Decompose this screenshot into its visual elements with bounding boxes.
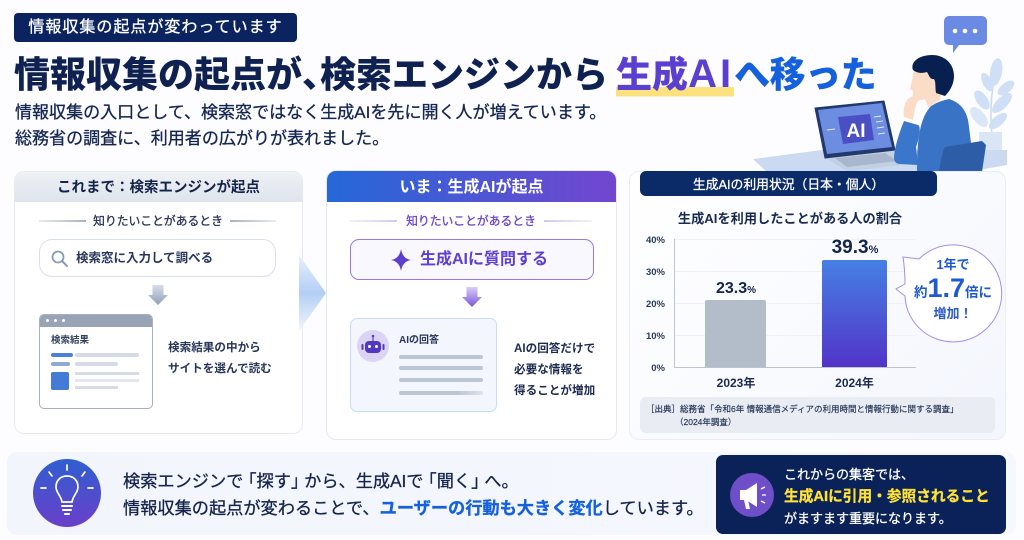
source note: ［出典］総務省「令和6年 情報通信メディアの利用時間と情報行動に関する調査」 <box>646 404 958 414</box>
panel: usage chart <box>629 171 1006 440</box>
source note <box>640 397 995 433</box>
callout: dark box <box>716 455 1006 534</box>
bar: 2024: 39.3% <box>832 237 879 258</box>
chart panel heading: 生成AIの利用状況（日本・個人） <box>693 177 884 192</box>
bar: 2024: 2024年 <box>835 375 874 390</box>
desk <box>753 150 1007 172</box>
dark box text: 生成AIに引用・参照されること <box>784 488 990 504</box>
icon: robot <box>357 330 389 362</box>
bottom message: 情報収集の起点が変わることで、ユーザーの行動も大きく変化しています。 <box>123 498 704 518</box>
icon: laptop <box>815 101 918 171</box>
bottom band <box>7 452 1016 535</box>
AI answer card <box>350 318 497 412</box>
panel heading: いま：生成AIが起点 <box>399 179 544 196</box>
ask text: 生成AIに質問する <box>420 251 548 268</box>
bar chart <box>646 235 916 390</box>
y axis labels: 10% <box>646 331 666 342</box>
subtitle: 情報収集の入口として、検索窓ではなく生成AIを先に開く人が増えています。 <box>15 103 606 122</box>
icon: light bulb <box>33 459 101 527</box>
callout: 1.7x: 1年で <box>936 257 970 272</box>
label: when wanting to know: 知りたいことがあるとき <box>93 214 223 228</box>
top tag <box>14 13 297 42</box>
icon: plant <box>967 57 1017 157</box>
panel: before <box>14 171 303 434</box>
bottom message <box>123 471 704 518</box>
bottom message: 検索エンジンで「探す」から、生成AIで「聞く」へ。 <box>123 471 519 491</box>
big arrow between panels <box>299 256 326 330</box>
window heading: 検索結果 <box>51 335 89 346</box>
results text <box>168 341 272 375</box>
chart title: 生成AIを利用したことがある人の割合 <box>678 211 902 226</box>
results text: 検索結果の中から <box>168 341 261 354</box>
answer text <box>514 342 595 397</box>
panel: now <box>326 170 617 440</box>
y axis labels: 40% <box>646 235 666 246</box>
title: 生成AI <box>616 52 734 96</box>
answer label: AIの回答 <box>399 335 439 346</box>
icon: speech bubble <box>944 16 987 53</box>
y axis labels <box>646 235 666 374</box>
callout: 1.7x: 約1.7倍に <box>914 273 992 303</box>
panel heading <box>327 171 616 202</box>
answer text: 得ることが増加 <box>514 384 595 397</box>
results text: サイトを選んで読む <box>168 362 272 375</box>
dark box text: がますます重要になります。 <box>784 511 952 526</box>
icon: laptop: AI <box>846 121 866 142</box>
panel heading <box>15 172 302 202</box>
subtitle <box>15 103 606 148</box>
window bar <box>40 315 154 327</box>
dark box text <box>784 467 990 526</box>
bar: 2023 <box>705 280 766 390</box>
bar: 2023: 23.3% <box>716 280 756 297</box>
bar: 2023: 2023年 <box>717 375 755 390</box>
answer text: 必要な情報を <box>514 363 584 376</box>
callout: 1.7x <box>895 244 1002 342</box>
source note: （2024年調査） <box>675 417 736 427</box>
chart panel heading <box>640 171 937 196</box>
icon: megaphone <box>730 473 774 517</box>
y axis labels: 0% <box>651 363 666 374</box>
answer text: AIの回答だけで <box>514 342 595 355</box>
ask AI box <box>350 239 594 280</box>
icon: sparkle <box>391 249 411 271</box>
y axis labels: 20% <box>646 299 666 310</box>
search text: 検索窓に入力して調べる <box>76 251 213 265</box>
window dots <box>46 319 49 322</box>
y axis labels: 30% <box>646 267 666 278</box>
illustration: person at laptop <box>753 16 1014 171</box>
callout: 1.7x: 増加！ <box>933 306 973 321</box>
panel heading: これまで：検索エンジンが起点 <box>57 180 260 196</box>
browser results window <box>39 314 153 409</box>
arrow down gray <box>148 285 168 305</box>
dark box text: これからの集客では、 <box>784 467 914 482</box>
person <box>894 55 986 172</box>
bar: 2024 <box>822 237 887 390</box>
icon: magnifier <box>52 250 68 267</box>
title: 情報収集の起点が、検索エンジンから へ移った <box>14 54 876 95</box>
subtitle: 総務省の調査に、利用者の広がりが表れました。 <box>15 129 389 148</box>
label: when wanting to know purple: 知りたいことがあるとき <box>406 214 536 228</box>
arrow down purple <box>462 287 482 307</box>
search box <box>39 239 276 277</box>
top tag: 情報収集の起点が変わっています <box>28 19 283 36</box>
